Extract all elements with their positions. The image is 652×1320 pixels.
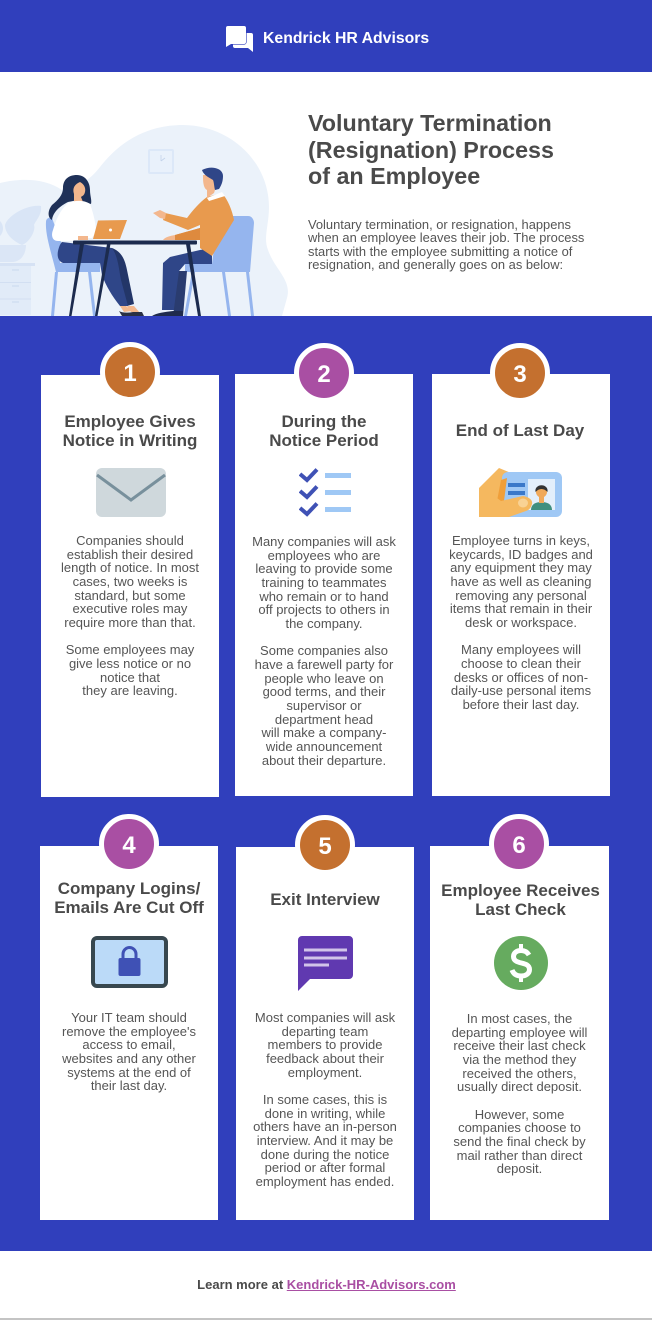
body text 5: done in writing, while: [265, 1106, 385, 1121]
number badge 3: 3: [513, 361, 527, 388]
body text 2: the company.: [285, 616, 363, 631]
footer text: Learn more at Kendrick-HR-Advisors.com: [197, 1277, 456, 1292]
number badge 4: [99, 814, 159, 874]
body text 2: who remain or to hand: [259, 589, 389, 604]
woman face: [73, 182, 85, 202]
body text 3: choose to clean their: [461, 656, 581, 671]
header band: [0, 0, 652, 72]
body text 1: cases, two weeks is: [73, 574, 187, 589]
number badge 1: [100, 342, 160, 402]
panel: step 3: [432, 343, 610, 796]
card background: [236, 847, 414, 1220]
icon: chat bubbles logo: [226, 26, 253, 52]
body text 5: members to provide: [268, 1037, 382, 1052]
body text 3: desks or offices of non-: [454, 670, 588, 685]
heading 2: [269, 412, 379, 450]
heading 4: Emails Are Cut Off: [54, 898, 204, 916]
body text 5: departing team: [282, 1024, 368, 1039]
body text 5: interview. And it may be: [257, 1133, 393, 1148]
body text 1: length of notice. In most: [61, 560, 199, 575]
body text 5: employment.: [288, 1065, 362, 1080]
number badge 1: 1: [123, 360, 137, 387]
number badge 6: [489, 814, 549, 874]
woman feet: [120, 306, 140, 313]
body text 1: executive roles may: [73, 601, 187, 616]
body text 1: require more than that.: [64, 615, 196, 630]
illustration: two people at a table: [0, 125, 288, 316]
body text 2: department head: [275, 712, 373, 727]
heading 3: End of Last Day: [456, 420, 584, 440]
wall clock: [148, 149, 174, 174]
body text 4: websites and any other: [62, 1051, 196, 1066]
body text 2: good terms, and their: [263, 684, 385, 699]
man sweater and arm: [163, 193, 234, 256]
body text 3: daily-use personal items: [451, 683, 591, 698]
body text 3: desk or workspace.: [465, 615, 577, 630]
cabinet: [0, 263, 35, 266]
plant: [5, 206, 41, 245]
body text 1: they are leaving.: [82, 683, 178, 698]
body text 3: items that remain in their: [450, 601, 592, 616]
body text 2: have a farewell party for: [255, 657, 393, 672]
body text 3: any equipment they may: [450, 560, 592, 575]
body text 6: usually direct deposit.: [457, 1079, 582, 1094]
body text 5: feedback about their: [266, 1051, 384, 1066]
body text 3: Employee turns in keys,: [452, 533, 590, 548]
body text 6: companies choose to: [458, 1120, 581, 1135]
body text 2: training to teammates: [261, 575, 386, 590]
body text 2: people who leave on: [264, 671, 384, 686]
body text 2: supervisor or: [286, 698, 362, 713]
number badge 4: 4: [122, 832, 136, 859]
woman hair: [49, 175, 91, 220]
icon: locked screen: [91, 936, 168, 988]
body text 2: wide announcement: [266, 739, 382, 754]
body text 4: [62, 1010, 196, 1093]
woman sweater: [52, 201, 96, 241]
body text 2: will make a company-: [262, 725, 386, 740]
body text 3: Many employees will: [461, 642, 581, 657]
icon: envelope: [96, 468, 166, 517]
body text 5: In some cases, this is: [263, 1092, 387, 1107]
body text 2: about their departure.: [262, 752, 386, 768]
panel: step 1: [41, 342, 219, 797]
body text 5: [253, 1010, 397, 1189]
title: [308, 110, 554, 189]
icon: ID badge in hand: [479, 468, 562, 517]
body text 6: In most cases, the: [467, 1011, 572, 1026]
panel: step 6: [430, 814, 609, 1220]
body text 1: [61, 533, 199, 698]
woman chair: [46, 218, 100, 272]
body text 6: mail rather than direct: [457, 1148, 582, 1163]
man head: [203, 175, 215, 198]
number badge 2: 2: [317, 361, 331, 388]
body text 6: received the others,: [462, 1066, 577, 1081]
heading 6: Employee Receives: [441, 880, 600, 900]
intro text: [308, 216, 584, 272]
body text 5: others have an in-person: [253, 1119, 397, 1134]
number badge 2: [294, 343, 354, 403]
panel: step 5: [236, 815, 414, 1220]
body text 1: give less notice or no: [69, 656, 191, 671]
card background: [41, 375, 219, 797]
heading 6: Last Check: [475, 900, 566, 918]
body text 1: notice that: [100, 670, 160, 685]
body text 3: keycards, ID badges and: [449, 547, 593, 562]
body text 5: period or after formal: [265, 1160, 385, 1175]
heading 4: [54, 878, 204, 916]
main blue band: [0, 316, 652, 1251]
title: of an Employee: [308, 163, 480, 189]
woman legs: [112, 248, 134, 306]
number badge 5: [295, 814, 355, 874]
body text 3: before their last day.: [463, 697, 579, 712]
body text 2: leaving to provide some: [255, 561, 393, 576]
number badge 6: 6: [512, 832, 526, 859]
icon: checklist: [299, 468, 351, 517]
number badge 5: 5: [318, 832, 332, 860]
heading 4: Company Logins/: [58, 878, 200, 898]
title: Voluntary Termination: [308, 110, 552, 136]
icon: dollar coin: [494, 936, 548, 990]
heading 1: Notice in Writing: [63, 430, 197, 450]
body text 6: deposit.: [497, 1161, 542, 1176]
body text 4: their last day.: [91, 1078, 167, 1093]
body text 2: Many companies will ask: [252, 534, 396, 549]
body text 3: have as well as cleaning: [451, 574, 591, 589]
table: [69, 244, 201, 316]
body text 1: Some employees may: [66, 642, 194, 657]
body text 3: [449, 533, 593, 712]
heading 6: [441, 880, 600, 918]
brand name: Kendrick HR Advisors: [263, 30, 429, 47]
intro text: Voluntary termination, or resignation, happens: [308, 216, 571, 232]
card background: [432, 374, 610, 796]
body text 5: Most companies will ask: [255, 1010, 395, 1025]
body text 6: via the method they: [463, 1052, 576, 1067]
body text 4: access to email,: [82, 1037, 176, 1052]
body text 3: removing any personal: [455, 588, 587, 603]
panel: step 4: [40, 814, 218, 1220]
man chair: [185, 216, 254, 272]
body text 6: receive their last check: [453, 1038, 586, 1053]
card background: [40, 846, 218, 1220]
intro text: resignation, and generally goes on as below:: [308, 257, 563, 272]
body text 6: send the final check by: [453, 1134, 586, 1149]
card background: [235, 374, 413, 796]
man legs: [162, 248, 212, 310]
body text 5: employment has ended.: [256, 1174, 394, 1189]
body text 2: [252, 534, 396, 768]
title: (Resignation) Process: [308, 136, 554, 162]
body text 4: systems at the end of: [67, 1065, 191, 1080]
body text 2: employees who are: [268, 548, 380, 563]
body text 6: [452, 1011, 587, 1176]
panel: step 2: [235, 343, 413, 796]
body text 2: Some companies also: [260, 643, 388, 658]
background blob: [0, 125, 288, 316]
body text 1: establish their desired: [67, 547, 193, 562]
body text 1: Companies should: [76, 533, 184, 548]
number badge 3: [490, 343, 550, 403]
heading 2: During the: [282, 412, 366, 430]
intro text: starts with the employee submitting a notice of: [308, 244, 572, 259]
body text 6: However, some: [475, 1107, 564, 1122]
heading 1: [63, 412, 197, 450]
body text 5: done during the notice: [261, 1147, 389, 1162]
intro text: when an employee leaves their job. The process: [308, 230, 584, 245]
body text 4: remove the employee's: [62, 1024, 196, 1039]
laptop: [93, 220, 127, 239]
body text 1: standard, but some: [74, 588, 186, 603]
body text 6: departing employee will: [452, 1025, 587, 1040]
card background: [430, 846, 609, 1220]
heading 1: Employee Gives: [64, 412, 196, 430]
body text 2: off projects to others in: [258, 602, 390, 617]
icon: speech bubble: [298, 936, 353, 991]
heading 5: Exit Interview: [270, 890, 380, 908]
body text 4: Your IT team should: [71, 1010, 187, 1025]
heading 2: Notice Period: [269, 430, 379, 450]
